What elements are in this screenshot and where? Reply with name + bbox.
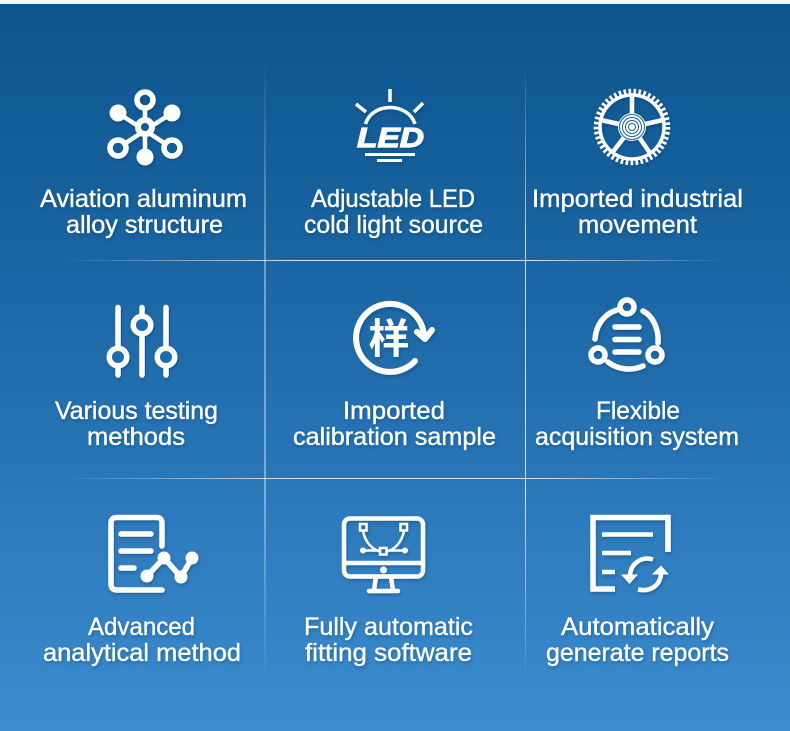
- text: automatically generate reports: generate reports: [546, 639, 729, 667]
- text: advanced analytical method: analytical method: [43, 639, 241, 667]
- panel: fully automatic fitting software: [304, 518, 473, 667]
- icon: report with refresh arrows: [593, 518, 669, 590]
- text: imported calibration sample: Imported: [343, 397, 445, 425]
- text: various testing methods: [55, 397, 218, 451]
- text: flexible acquisition system: Flexible: [596, 397, 680, 425]
- text: advanced analytical method: Advanced: [88, 613, 195, 641]
- panel: advanced analytical method: [43, 518, 241, 667]
- icon: acquisition cycle: [591, 300, 662, 369]
- text: automatically generate reports: Automatically: [561, 613, 715, 641]
- panel: imported calibration sample: [293, 304, 496, 451]
- text: imported industrial movement: [532, 185, 743, 239]
- icon: LED lamp: [356, 89, 424, 160]
- text: automatically generate reports: [546, 613, 729, 667]
- text: aviation aluminum alloy structure: Aviation aluminum: [40, 185, 247, 213]
- panel: automatically generate reports: [546, 518, 729, 667]
- icon: document with trend line: [111, 518, 198, 590]
- text: adjustable LED cold light source: [304, 185, 483, 239]
- icon: monitor with bezier curve: [344, 518, 423, 591]
- text: flexible acquisition system: acquisition system: [535, 423, 739, 451]
- text: imported calibration sample: calibration sample: [293, 423, 496, 451]
- panel: various testing methods: [55, 308, 218, 451]
- text: adjustable LED cold light source: cold light source: [304, 211, 483, 239]
- icon: sliders: [109, 308, 175, 375]
- icon: gear wheel: [596, 92, 668, 162]
- panel: adjustable LED cold light source: [304, 89, 483, 239]
- text: aviation aluminum alloy structure: [40, 185, 247, 239]
- text: imported calibration sample: [293, 397, 496, 451]
- icon: LED lamp: LED: [357, 122, 424, 153]
- panel: imported industrial movement: [532, 92, 743, 239]
- panel: aviation aluminum alloy structure: [40, 92, 247, 239]
- text: fully automatic fitting software: fitting software: [305, 639, 472, 667]
- text: adjustable LED cold light source: Adjustable LED: [311, 185, 475, 213]
- text: fully automatic fitting software: Fully automatic: [304, 613, 473, 641]
- text: flexible acquisition system: [535, 397, 739, 451]
- icon: sample cycle arrow: [356, 304, 432, 372]
- icon: sample cycle arrow: 样: [368, 305, 410, 365]
- text: advanced analytical method: [43, 613, 241, 667]
- panel: flexible acquisition system: [535, 300, 739, 451]
- text: aviation aluminum alloy structure: alloy structure: [66, 211, 223, 239]
- text: various testing methods: methods: [87, 423, 185, 451]
- text: imported industrial movement: Imported industrial: [532, 185, 743, 213]
- text: fully automatic fitting software: [304, 613, 473, 667]
- icon: molecule nodes: [110, 92, 180, 166]
- text: various testing methods: Various testing: [55, 397, 218, 425]
- text: imported industrial movement: movement: [578, 211, 697, 239]
